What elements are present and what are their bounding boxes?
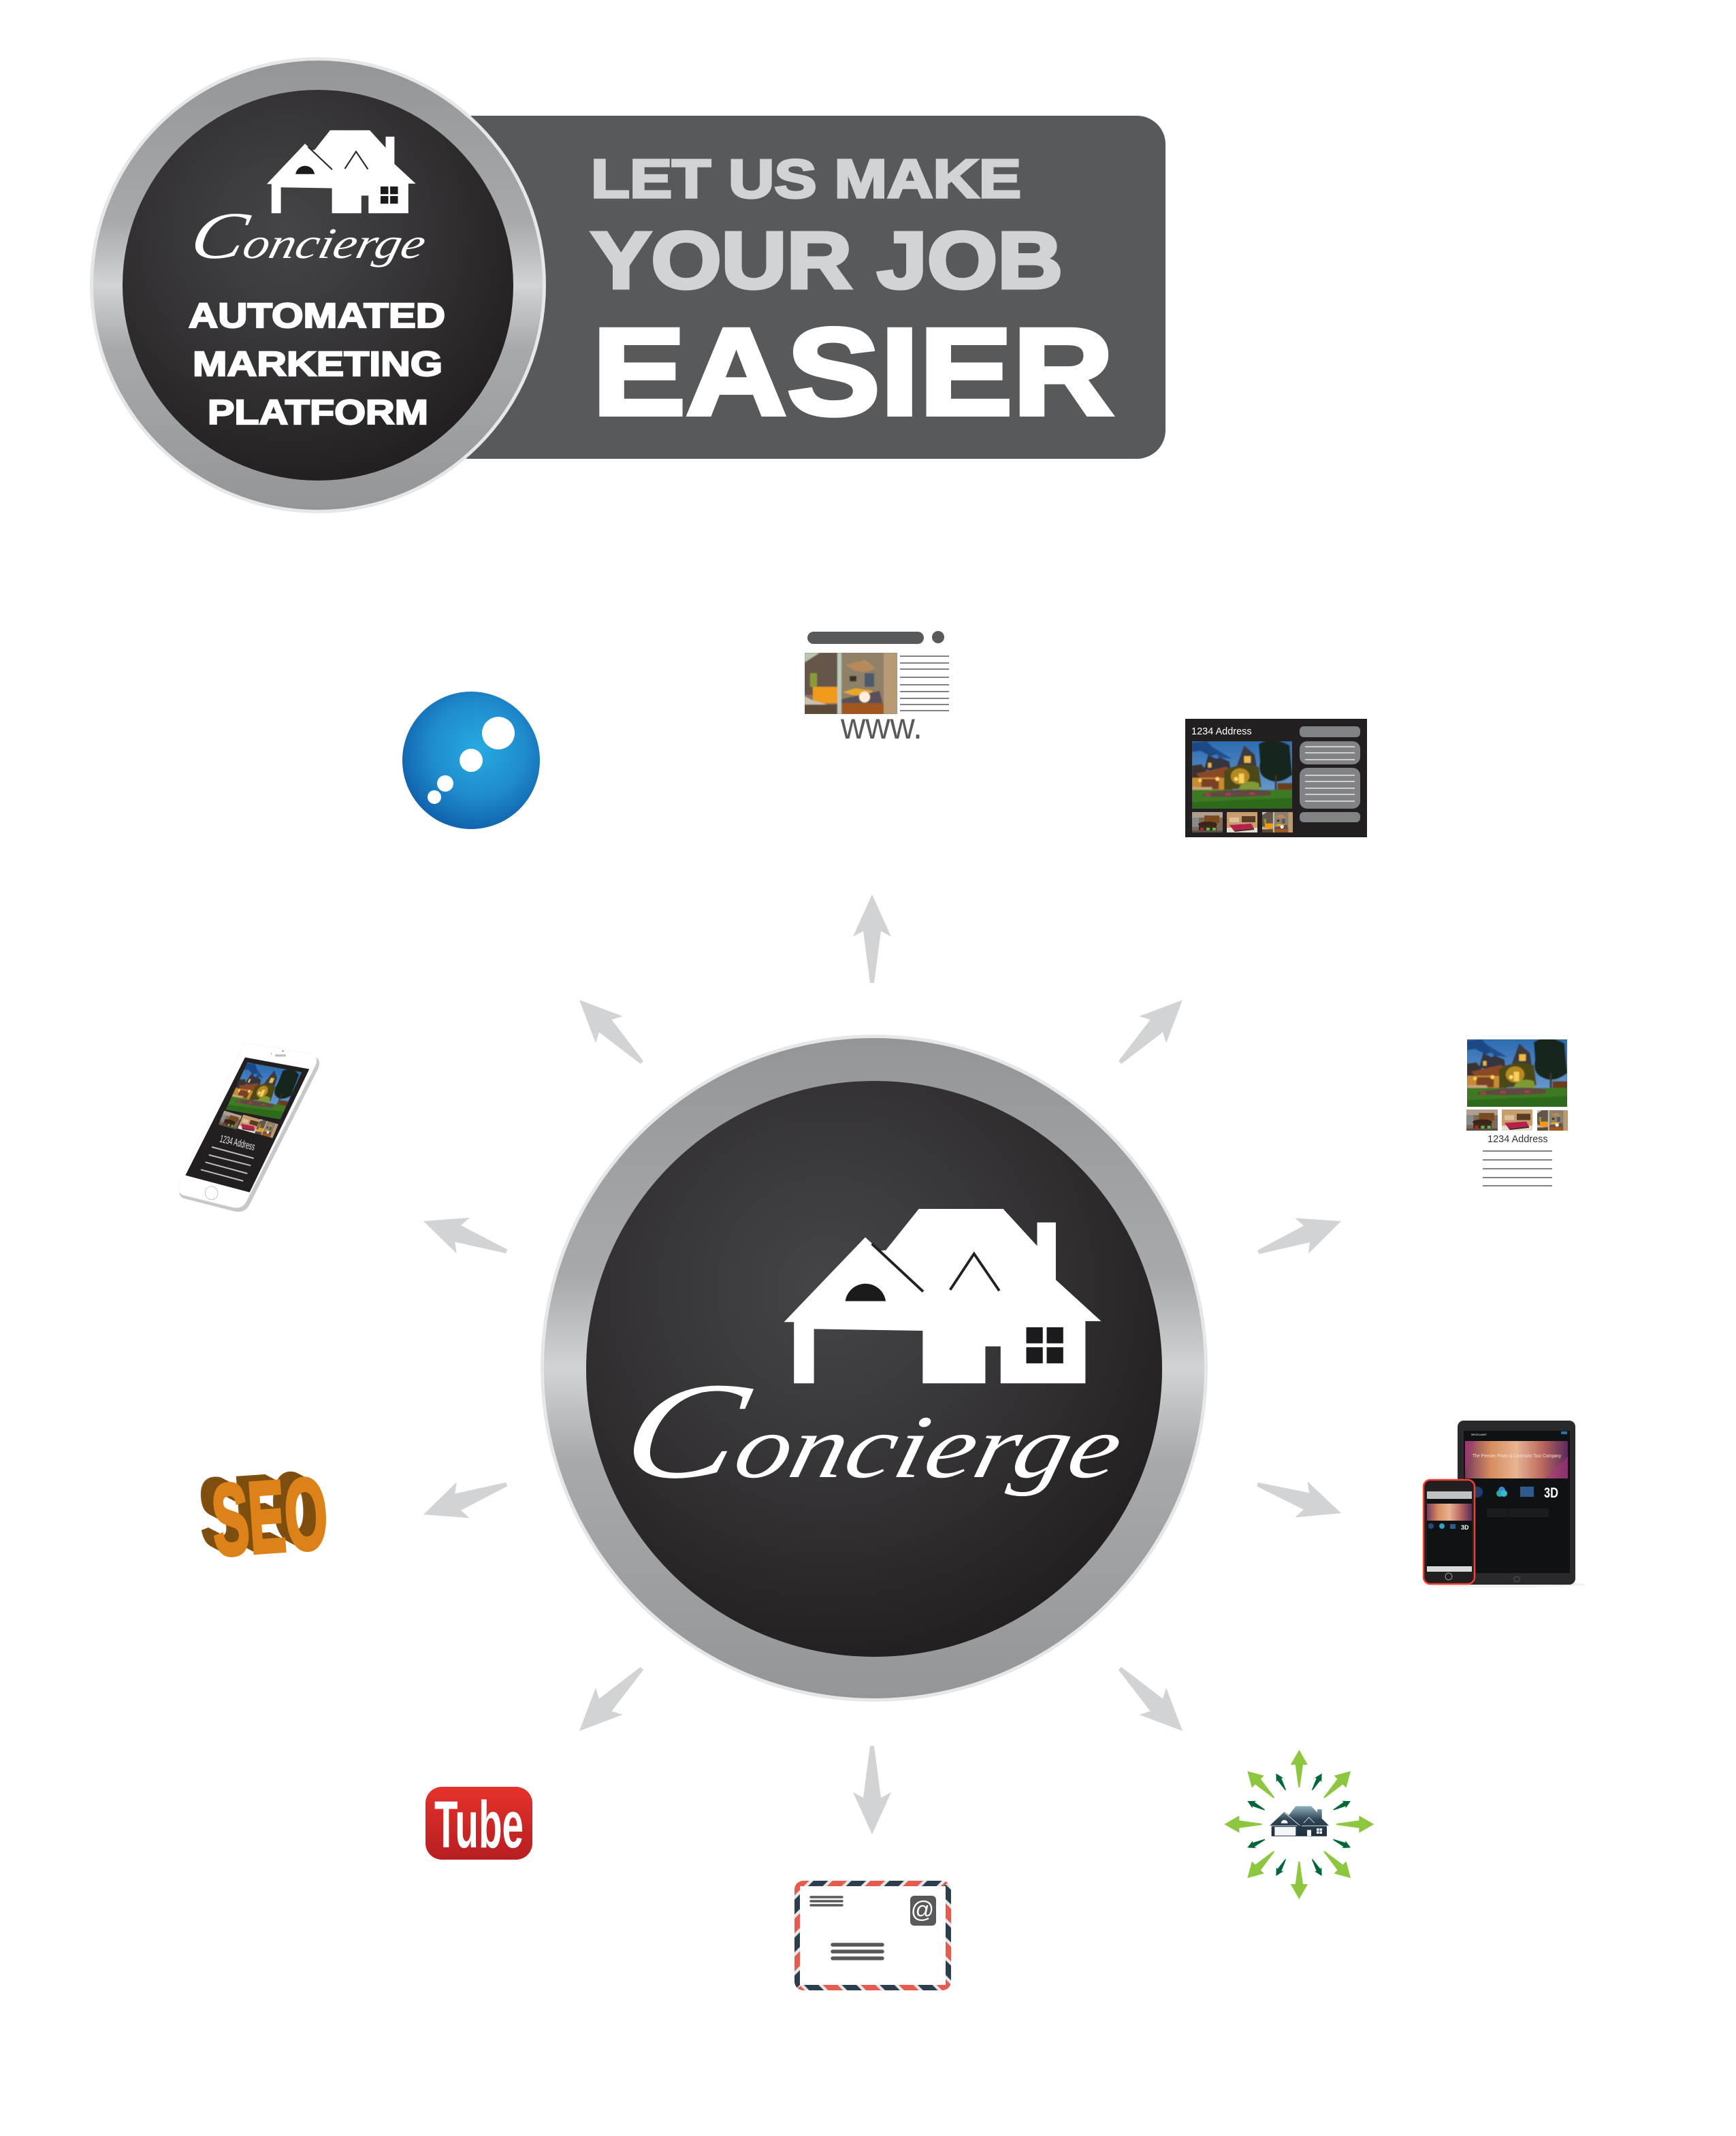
banner background [436,116,1166,459]
tablet: SPOTLIGHT [1471,1433,1487,1436]
icon: 3D SEO text: SEO [208,1457,331,1577]
heading line: your job: YOUR JOB [591,216,1063,306]
tablet: 3D [1544,1485,1558,1501]
flyer address: 1234 Address [1488,1134,1548,1145]
icon: property flyer [1466,1038,1568,1186]
badge text: platform: PLATFORM [208,393,428,432]
phone [1424,1480,1475,1584]
icon: tablet and phone website [1423,1421,1586,1587]
icon: youtube logo: Tube [434,1787,524,1862]
central concierge logo [541,1035,1208,1702]
badge text: marketing: MARKETING [193,344,443,383]
icon: syndication green arrows with house [1224,1750,1374,1899]
icon: website www page [805,631,949,747]
icon: tilted phone listing [178,1043,319,1212]
badge text: automated: AUTOMATED [189,296,445,335]
phone: 3D [1461,1524,1469,1531]
heading line: let us make: LET US MAKE [591,148,1021,209]
small house [1270,1806,1329,1836]
phone address: 1234 Address [219,1133,256,1153]
icon: blue bubbles ball [402,692,540,829]
tablet [1458,1421,1575,1585]
central wordmark: Concierge [609,1354,1144,1507]
icon: email envelope [794,1881,951,1990]
icon: youtube logo [425,1787,532,1862]
tablet: The Premier Photo & Cinematic Tour Company [1473,1454,1561,1459]
badge: concierge automated marketing platform [90,57,546,513]
banner: let us make your job easier [436,116,1166,459]
icon: dark property page [1185,719,1367,837]
www label: www. [840,706,922,747]
badge wordmark: Concierge [184,198,436,272]
icon: badge house [267,130,416,213]
arrows radiating from central logo [417,894,1348,1834]
at sign: @ [911,1897,934,1923]
heading line: easier: EASIER [592,302,1114,441]
address label: 1234 Address [1191,726,1252,737]
icon: central house [784,1209,1101,1383]
